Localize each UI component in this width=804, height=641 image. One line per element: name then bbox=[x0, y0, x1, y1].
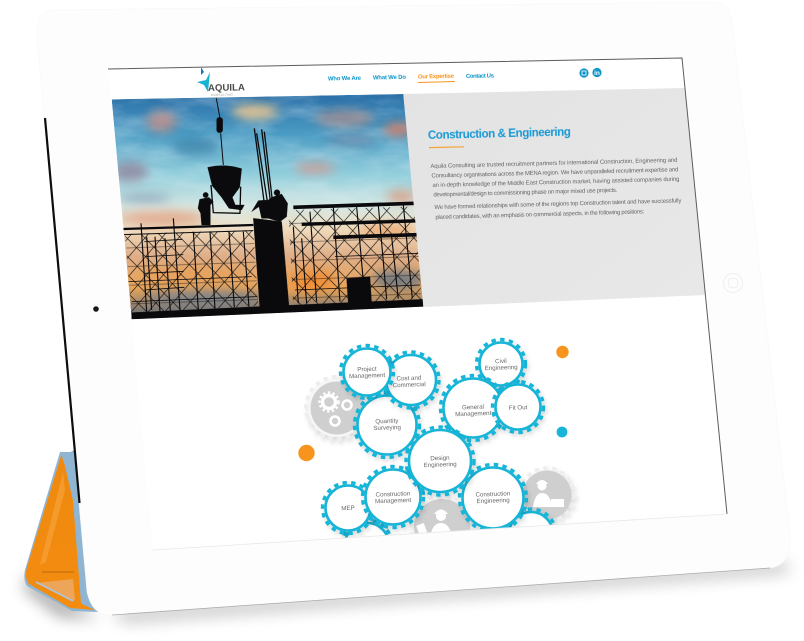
gear: Design Engineering bbox=[406, 427, 474, 495]
gear: Construction Engineering: Construction bbox=[475, 490, 510, 499]
gear: Civil Engineering: Civil bbox=[495, 358, 507, 365]
gear: Construction Management: Management bbox=[375, 497, 412, 505]
gear: partial lower left bbox=[342, 519, 393, 538]
camera bbox=[93, 306, 99, 312]
screen edge lines bbox=[108, 58, 727, 514]
gear: Quantity Surveying bbox=[354, 392, 420, 458]
decorative orange dot top right bbox=[556, 346, 569, 358]
active nav underline bbox=[418, 82, 455, 83]
body paragraphs: placed candidates, with an emphasis on commercial aspects, in the following positions: bbox=[435, 209, 645, 221]
gear: Quantity Surveying: Surveying bbox=[373, 424, 402, 432]
gear: Construction Management: Construction bbox=[375, 490, 410, 499]
decorative orange dot left bbox=[298, 445, 315, 461]
navigation bar text: Who We Are bbox=[328, 76, 362, 82]
navigation bar text bbox=[328, 73, 494, 80]
navigation bar text: Our Expertise bbox=[418, 74, 455, 80]
heading underline bbox=[429, 146, 464, 148]
gear: Cost and Commercial bbox=[383, 352, 439, 408]
gear: MEP: MEP bbox=[341, 505, 355, 512]
gear: Construction Engineering bbox=[460, 464, 526, 532]
workers and rebar bbox=[198, 128, 288, 225]
home button bbox=[724, 274, 742, 292]
body paragraphs: Aquila Consulting are trusted recruitment partners for international Construction, Engineering and bbox=[430, 158, 677, 170]
gear: Cost and Commercial: Cost and bbox=[396, 375, 421, 383]
gear: Construction Engineering: Engineering bbox=[476, 497, 510, 505]
grey gear: engineer bbox=[410, 494, 476, 534]
gear: General Management: General bbox=[462, 404, 484, 411]
scaffolding bbox=[123, 203, 424, 320]
gear: General Management bbox=[440, 376, 506, 440]
social icons bbox=[579, 68, 602, 78]
tablet lower edge highlight bbox=[112, 568, 770, 615]
body paragraphs: Consultancy organisations across the MENA region. We have unparalleled recruitment expertise and bbox=[431, 167, 678, 179]
navigation bar text: What We Do bbox=[373, 75, 406, 81]
tablet black side edge bbox=[45, 118, 80, 503]
Aquila logo bbox=[197, 67, 245, 97]
screen bbox=[108, 58, 727, 570]
tablet drop shadow bbox=[24, 562, 790, 622]
body paragraphs: We have formed relationships with some of the regions top Construction talent and have successfully bbox=[434, 198, 682, 211]
heading: Construction & Engineering bbox=[428, 126, 571, 142]
screen content bbox=[112, 67, 705, 570]
screen bottom edge bbox=[153, 514, 727, 550]
gear: Design Engineering: Engineering bbox=[424, 461, 457, 469]
gear: Construction Management bbox=[362, 466, 424, 528]
gear: Project Management: Project bbox=[357, 366, 377, 373]
decorative cyan dot bbox=[557, 427, 567, 437]
gear: Quantity Surveying: Quantity bbox=[375, 418, 399, 425]
social icons: in bbox=[594, 70, 600, 77]
grey text panel bbox=[403, 88, 705, 307]
gear: Cost and Commercial: Commercial bbox=[393, 381, 426, 389]
body paragraphs: an in-depth knowledge of the Middle East Construction market, having assisted companies during bbox=[432, 177, 679, 189]
Aquila logo: AQUILA bbox=[208, 82, 245, 94]
body paragraphs bbox=[430, 158, 682, 221]
grey gear: worker with bricks bbox=[520, 468, 574, 522]
orange and blue folding stand bbox=[24, 450, 98, 612]
gear: Design Engineering: Design bbox=[430, 455, 450, 462]
body paragraphs: developmental/design to commissioning phase on major mixed use projects. bbox=[433, 188, 618, 198]
Aquila logo: CONSULTING bbox=[211, 93, 234, 97]
gear: MEP bbox=[322, 482, 374, 534]
gear: Project Management: Management bbox=[349, 372, 386, 380]
gear: Fit Out: Fit Out bbox=[509, 404, 528, 412]
gear: Fit Out bbox=[492, 382, 544, 432]
navigation bar text: Contact Us bbox=[466, 73, 495, 80]
crane hook and bucket bbox=[208, 98, 244, 213]
construction photo bbox=[112, 93, 425, 320]
gear: partial lower right bbox=[509, 507, 557, 528]
gear: Project Management bbox=[340, 346, 394, 398]
gear: Civil Engineering bbox=[476, 340, 526, 388]
grey gear: tools bbox=[306, 377, 368, 439]
gear: General Management: Management bbox=[455, 410, 492, 418]
gear: Civil Engineering: Engineering bbox=[485, 364, 518, 372]
